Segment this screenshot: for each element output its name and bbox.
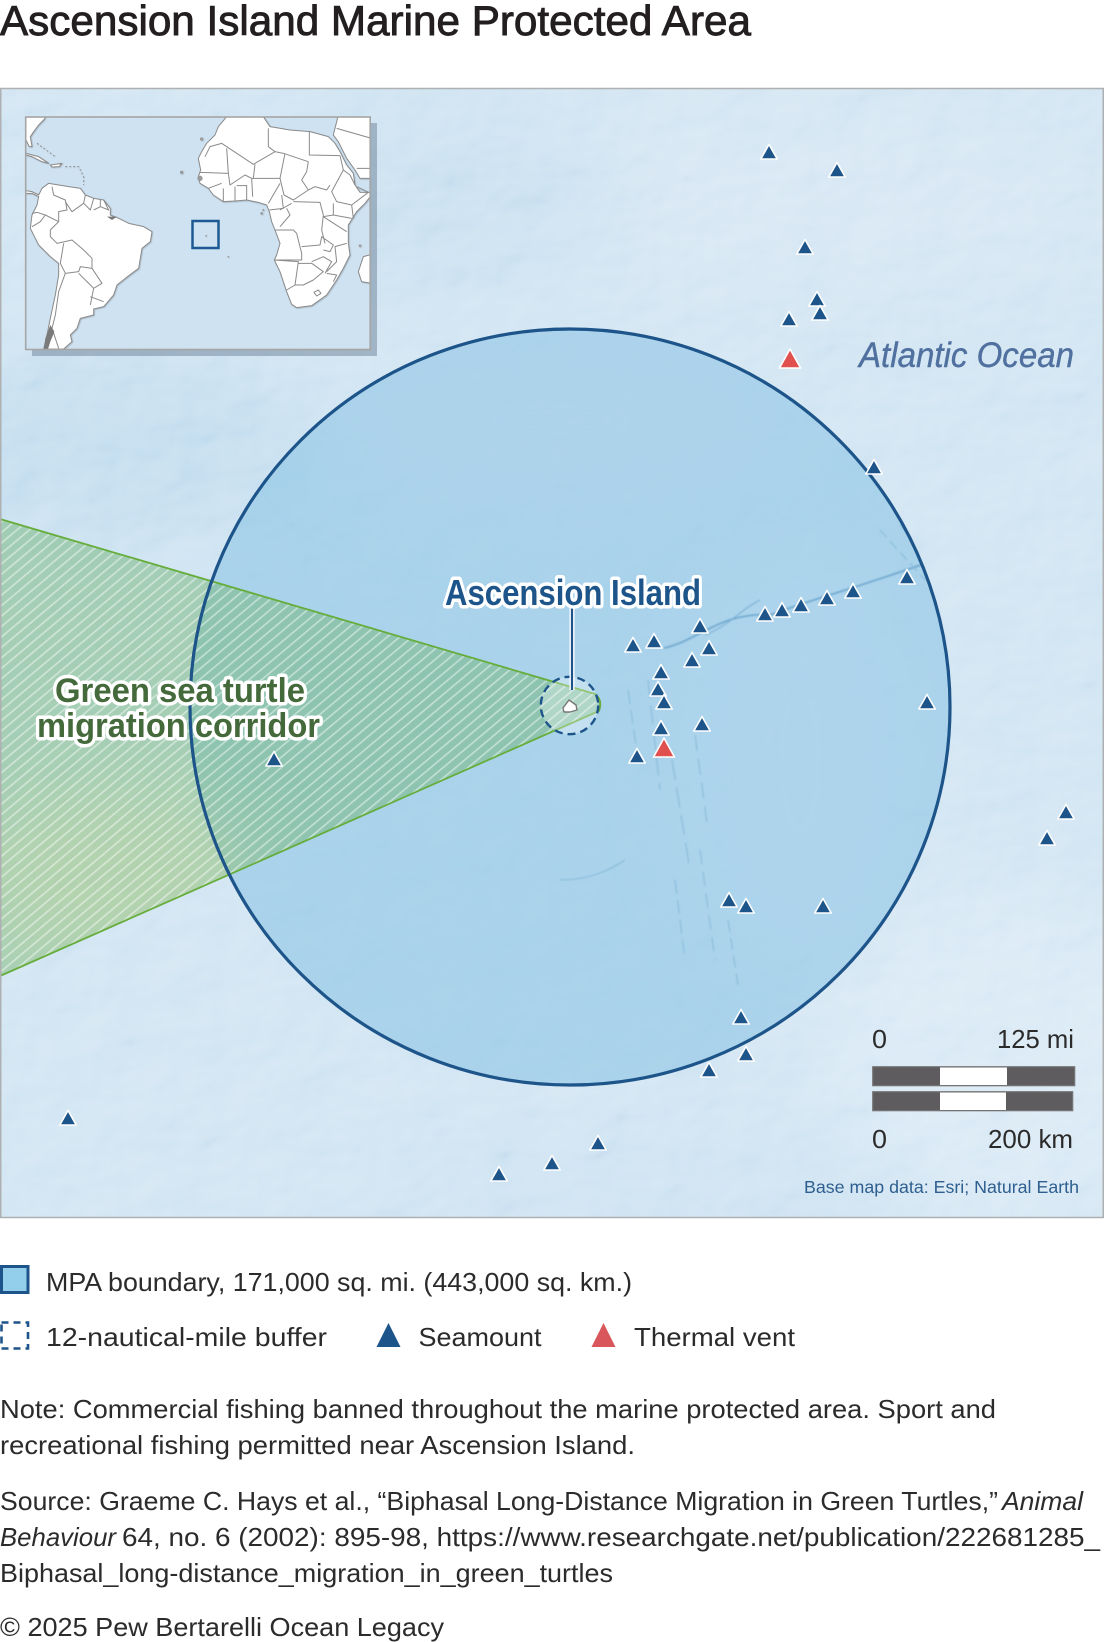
seamount markers xyxy=(60,144,1074,1181)
migration corridor xyxy=(0,519,600,976)
source: 64, no. 6 (2002): 895-98, https://www.researchgate.net/publication/222681285_ xyxy=(122,1522,1101,1552)
MPA boundary circle xyxy=(190,329,950,1085)
label: Atlantic Ocean: Atlantic Ocean xyxy=(857,336,1074,375)
Ascension Island leader line xyxy=(570,608,574,690)
note: recreational fishing permitted near Ascension Island. xyxy=(0,1430,635,1460)
12-nautical-mile buffer xyxy=(541,677,598,734)
label: Ascension Island: Ascension Island xyxy=(445,572,701,613)
panel: map xyxy=(0,88,1104,1230)
inset: Americas xyxy=(22,115,152,349)
label: green sea turtle migration corridor xyxy=(37,672,320,745)
scale bar: 125 mi xyxy=(997,1024,1074,1054)
scale bar: 0 xyxy=(872,1024,887,1054)
inset locator map xyxy=(22,115,377,356)
legend: MPA boundary: MPA boundary, 171,000 sq. mi. (443,000 sq. km.) xyxy=(46,1267,632,1297)
seafloor fracture lines xyxy=(560,525,945,985)
thermal vent markers xyxy=(654,349,800,757)
legend: thermal vent: Thermal vent xyxy=(634,1322,796,1352)
note xyxy=(0,1394,996,1460)
legend xyxy=(2,1266,796,1352)
base map credit: Base map data: Esri; Natural Earth xyxy=(804,1177,1079,1197)
label: green sea turtle migration corridor: Green sea turtle xyxy=(55,672,305,710)
scale bar xyxy=(872,1024,1075,1154)
label: green sea turtle migration corridor: migration corridor xyxy=(37,707,320,745)
legend: buffer: 12-nautical-mile buffer xyxy=(46,1322,327,1352)
source: Animal xyxy=(1000,1486,1084,1516)
inset: Africa and Arabia xyxy=(180,115,372,308)
source xyxy=(0,1486,1101,1588)
source: Source: Graeme C. Hays et al., “Biphasal Long-Distance Migration in Green Turtles,” xyxy=(0,1486,998,1516)
Ascension Island shape xyxy=(563,700,577,712)
scale bar: 200 km xyxy=(988,1124,1073,1154)
copyright: © 2025 Pew Bertarelli Ocean Legacy xyxy=(0,1612,444,1642)
legend: seamount: Seamount xyxy=(418,1322,542,1352)
source: Biphasal_long-distance_migration_in_green_turtles xyxy=(0,1558,613,1588)
scale bar: 0 xyxy=(872,1124,887,1154)
MPA boundary outline xyxy=(190,329,950,1085)
ocean base map xyxy=(0,88,1104,1230)
note: Note: Commercial fishing banned throughout the marine protected area. Sport and xyxy=(0,1394,996,1424)
source: Behaviour xyxy=(0,1522,117,1552)
map border xyxy=(1,88,1103,1218)
inset: study area square xyxy=(192,221,218,248)
